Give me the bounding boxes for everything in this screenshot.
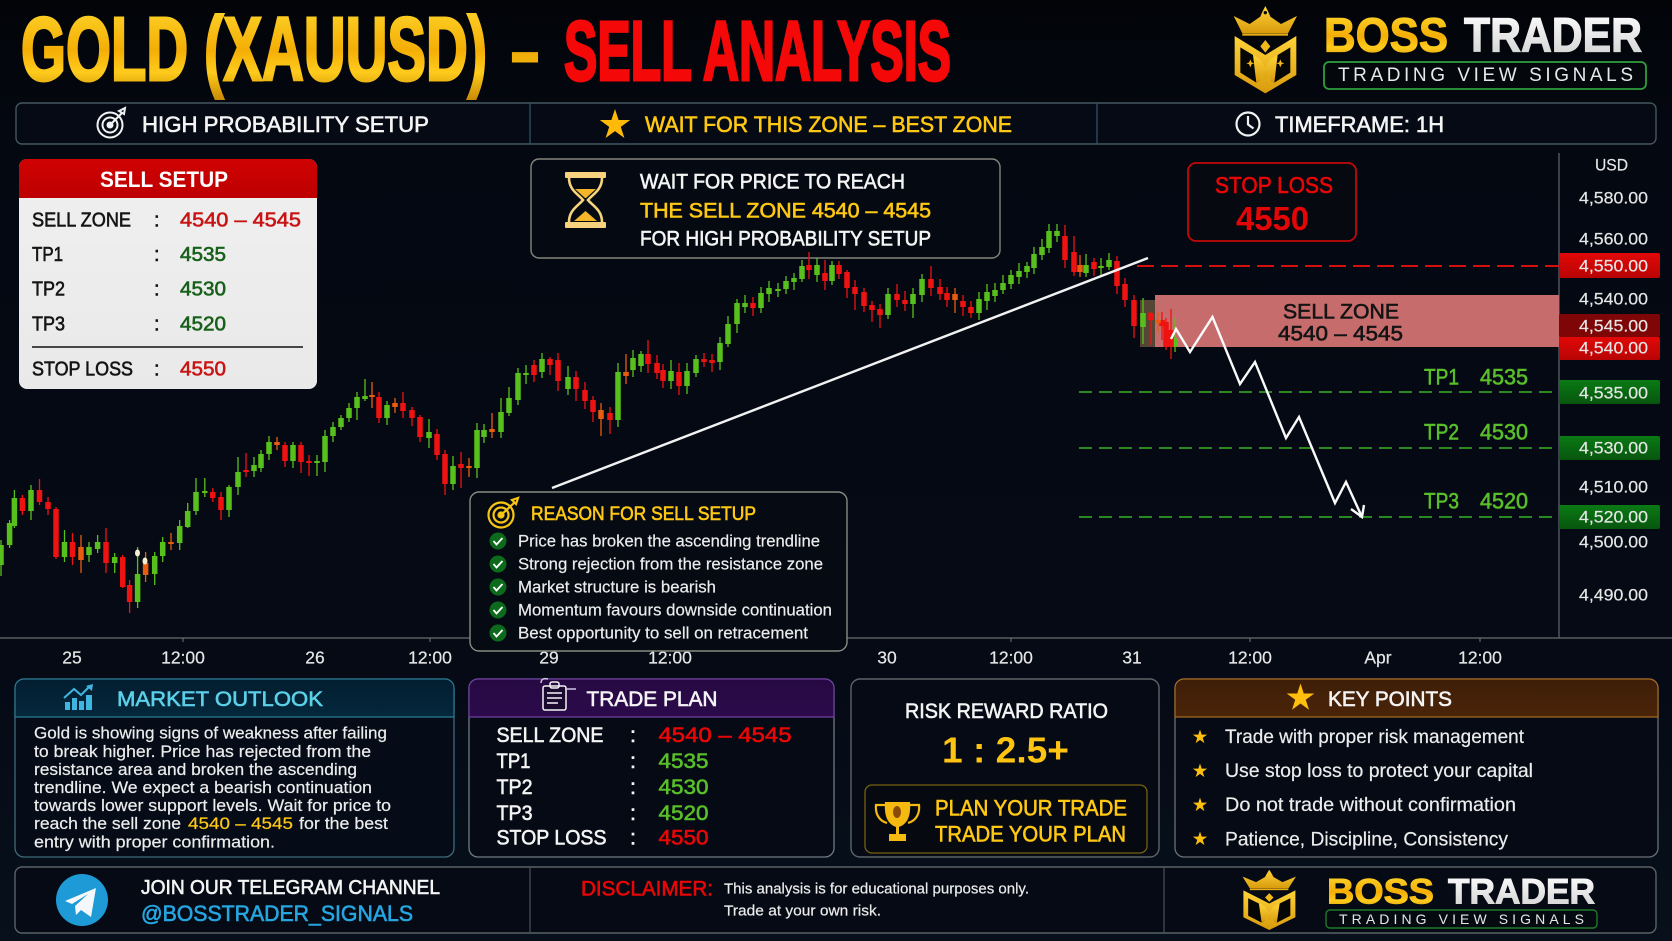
market outlook body: entry with proper confirmation.: [34, 834, 275, 852]
sell setup rows: :: [154, 358, 160, 380]
icon: star: [600, 109, 630, 138]
orange candles: [81, 255, 1158, 582]
sell setup rows: TP2: [32, 278, 65, 300]
text: wait message: THE SELL ZONE 4540 – 4545: [640, 200, 931, 222]
sell setup rows: STOP LOSS: [32, 358, 133, 380]
icon: clock: [1236, 112, 1260, 136]
panel: stop loss: STOP LOSS: [1215, 172, 1333, 198]
panel: trade plan: [469, 679, 834, 857]
market outlook body: Gold is showing signs of weakness after failing: [34, 724, 387, 742]
text: high probability setup: HIGH PROBABILITY SETUP: [142, 112, 429, 137]
panel: risk reward ratio: [851, 679, 1159, 857]
sell setup rows: :: [154, 278, 160, 300]
ascending trendline: [552, 258, 1148, 488]
plan callout: TRADE YOUR PLAN: [935, 822, 1126, 846]
icon: rising bars: [64, 684, 93, 710]
time axis labels: 12:00: [161, 648, 205, 668]
telegram text: [141, 877, 440, 926]
footer bar: [15, 867, 1656, 933]
footer wordmark: TRADING VIEW SIGNALS: [1339, 911, 1584, 927]
icon: crown shield: [1234, 6, 1297, 93]
price labels: 4,520.00: [1579, 508, 1648, 526]
icon: target: [98, 108, 125, 138]
sell setup rows: 4550: [180, 358, 226, 380]
TP labels: 4535: [1480, 364, 1528, 390]
TP labels: TP3: [1424, 488, 1459, 514]
price axis: [1559, 156, 1660, 604]
info bar: [16, 103, 1656, 144]
sell setup rows: TP3: [32, 314, 65, 336]
trade plan rows: :: [630, 749, 636, 773]
market outlook body: to break higher. Price has rejected from the: [34, 743, 371, 761]
trade plan rows: 4540 – 4545: [658, 723, 792, 747]
time axis labels: 12:00: [989, 648, 1033, 668]
sell setup rows: 4540 – 4545: [180, 210, 301, 232]
plan callout: [865, 785, 1147, 853]
logo wordmark: [1324, 10, 1646, 89]
sell zone label: [1278, 300, 1403, 346]
logo wordmark: TRADER: [1464, 10, 1642, 62]
trade plan rows: SELL ZONE: [496, 723, 604, 747]
trade plan rows: TP2: [496, 775, 532, 799]
market outlook header: [15, 679, 454, 717]
reason checklist: Best opportunity to sell on retracement: [518, 624, 808, 642]
panel: stop loss: 4550: [1236, 200, 1309, 237]
red candles: [22, 225, 1171, 613]
TP labels: 4530: [1480, 420, 1528, 444]
price labels: 4,580.00: [1579, 188, 1648, 208]
title: SELL ANALYSIS: [564, 4, 951, 98]
sell setup rows: 4520: [180, 314, 226, 336]
time axis labels: [62, 648, 1502, 668]
logo: Boss Trader header: [1234, 6, 1646, 93]
sell setup rows: :: [154, 314, 160, 336]
logo wordmark: TRADING VIEW SIGNALS: [1338, 65, 1633, 86]
key points list: Use stop loss to protect your capital: [1225, 760, 1533, 782]
price labels: 4,560.00: [1579, 230, 1648, 248]
icon: gold target: [488, 498, 518, 528]
market outlook body: [34, 724, 391, 852]
green candles: [1, 224, 1175, 608]
chart highlights: [135, 550, 148, 564]
sell setup header: [19, 159, 317, 198]
disclaimer: This analysis is for educational purposes only.: [724, 880, 1029, 898]
price labels: 4,490.00: [1579, 586, 1648, 604]
price labels: 4,545.00: [1579, 316, 1648, 336]
sell setup title: SELL SETUP: [100, 167, 228, 192]
price labels: 4,500.00: [1579, 532, 1648, 552]
sell setup rows: 4530: [180, 278, 226, 300]
sell setup rows: SELL ZONE: [32, 210, 131, 232]
callout text: PLAN YOUR TRADE: [935, 796, 1127, 820]
reason checklist: Momentum favours downside continuation: [518, 600, 832, 620]
text: timeframe: TIMEFRAME: 1H: [1275, 112, 1444, 137]
trade plan rows: 4550: [658, 826, 709, 850]
market outlook body: 4540 – 4545: [188, 815, 293, 833]
price labels: 4,535.00: [1579, 384, 1648, 402]
trade plan rows: 4535: [658, 749, 709, 773]
text: best zone: WAIT FOR THIS ZONE – BEST ZONE: [645, 112, 1012, 137]
trade plan rows: :: [630, 801, 636, 825]
market outlook body: for the best: [299, 815, 388, 833]
icon: trophy: [876, 802, 919, 841]
icon: telegram: [56, 874, 108, 926]
stop loss dashed line: [1137, 265, 1559, 267]
candlestick chart: [1, 224, 1175, 613]
title: –: [511, 4, 539, 98]
logo: footer Boss Trader: [1243, 870, 1597, 930]
panel: reason for sell setup: [470, 492, 847, 651]
trade plan rows: :: [630, 826, 636, 850]
key points list: Do not trade without confirmation: [1225, 794, 1516, 816]
time axis labels: 30: [877, 648, 897, 668]
trade plan rows: :: [630, 775, 636, 799]
trade plan rows: 4520: [658, 801, 709, 825]
disclaimer: DISCLAIMER:: [581, 878, 713, 900]
price labels: 4,510.00: [1579, 478, 1648, 496]
panel: sell setup: [19, 159, 317, 389]
sell zone label: SELL ZONE: [1283, 300, 1399, 324]
trade plan rows: [496, 723, 792, 850]
projected price path arrow: [1171, 317, 1364, 517]
time axis labels: 12:00: [408, 648, 452, 668]
trade plan rows: :: [630, 723, 636, 747]
TP labels: TP2: [1424, 420, 1459, 444]
icon: footer crown shield: [1243, 870, 1296, 930]
footer wordmark: TRADER: [1448, 872, 1595, 912]
time axis labels: 31: [1122, 648, 1142, 668]
time axis labels: 12:00: [1458, 648, 1502, 668]
take-profit dashed lines: [1079, 392, 1559, 517]
sell setup rows: TP1: [32, 244, 63, 266]
reason title: REASON FOR SELL SETUP: [531, 504, 756, 525]
sell zone band: [1140, 295, 1559, 347]
title: GOLD (XAUUSD): [21, 0, 487, 100]
price labels: 4,550.00: [1579, 256, 1648, 276]
key points list: [1193, 726, 1533, 850]
sell setup rows: :: [154, 210, 160, 232]
trade plan header: [469, 679, 834, 717]
sell zone label: 4540 – 4545: [1278, 322, 1403, 346]
risk reward heading: RISK REWARD RATIO: [905, 700, 1108, 723]
market outlook body: reach the sell zone: [34, 815, 181, 833]
chart: price axes: [0, 153, 1672, 668]
panel: wait for price: [531, 159, 1000, 258]
key points header: [1175, 679, 1658, 717]
trade plan rows: TP3: [496, 801, 533, 825]
sell setup rows: [32, 210, 303, 380]
trade plan title: TRADE PLAN: [586, 688, 718, 711]
key points list: Patience, Discipline, Consistency: [1225, 828, 1508, 850]
price labels: USD: [1595, 156, 1628, 174]
time axis labels: 12:00: [1228, 648, 1272, 668]
market outlook body: trendline. We expect a bearish continuation: [34, 779, 372, 797]
ratio value: 1 : 2.5+: [942, 730, 1069, 770]
market outlook body: towards lower support levels. Wait for price to: [34, 797, 391, 815]
time axis labels: 12:00: [648, 648, 692, 668]
telegram text: JOIN OUR TELEGRAM CHANNEL: [141, 877, 440, 899]
disclaimer: [581, 878, 1029, 920]
TP labels: 4520: [1480, 488, 1528, 514]
time axis labels: 26: [305, 648, 325, 668]
trade plan rows: 4530: [658, 775, 709, 799]
text: wait message: [640, 170, 931, 250]
footer wordmark: BOSS: [1327, 872, 1434, 912]
reason checklist: Price has broken the ascending trendline: [518, 532, 820, 550]
TP labels: [1424, 364, 1528, 514]
key points list: Trade with proper risk management: [1225, 726, 1525, 748]
reason checklist: Strong rejection from the resistance zone: [518, 554, 823, 574]
key points title: KEY POINTS: [1328, 688, 1452, 711]
TP labels: TP1: [1424, 364, 1459, 390]
price labels: [1579, 156, 1648, 604]
footer wordmark: [1326, 872, 1597, 928]
reason checklist: Market structure is bearish: [518, 578, 716, 596]
time axis labels: Apr: [1364, 648, 1392, 668]
market outlook body: resistance area and broken the ascending: [34, 761, 357, 779]
disclaimer: Trade at your own risk.: [724, 902, 881, 920]
market outlook title: MARKET OUTLOOK: [117, 688, 323, 711]
price labels: 4,540.00: [1579, 290, 1648, 308]
trade plan rows: STOP LOSS: [496, 826, 606, 850]
icon: key star: [1287, 684, 1314, 710]
price badges: [1559, 253, 1660, 529]
panel: market outlook: [15, 679, 454, 857]
text: wait message: WAIT FOR PRICE TO REACH: [640, 170, 905, 194]
time axis labels: 29: [539, 648, 559, 668]
sell setup rows: :: [154, 244, 160, 266]
sell setup rows: 4535: [180, 244, 226, 266]
text: wait message: FOR HIGH PROBABILITY SETUP: [640, 228, 931, 250]
panel: stop loss: [1188, 163, 1356, 241]
price labels: 4,530.00: [1579, 438, 1648, 458]
reason checklist: [490, 532, 832, 642]
telegram text: @BOSSTRADER_SIGNALS: [141, 901, 413, 926]
icon: clipboard: [541, 679, 576, 710]
trade plan rows: TP1: [496, 749, 530, 773]
icon: hourglass: [565, 172, 606, 228]
time axis labels: 25: [62, 648, 82, 668]
panel: key points: [1175, 679, 1658, 857]
logo wordmark: BOSS: [1324, 10, 1448, 62]
price labels: 4,540.00: [1579, 338, 1648, 358]
